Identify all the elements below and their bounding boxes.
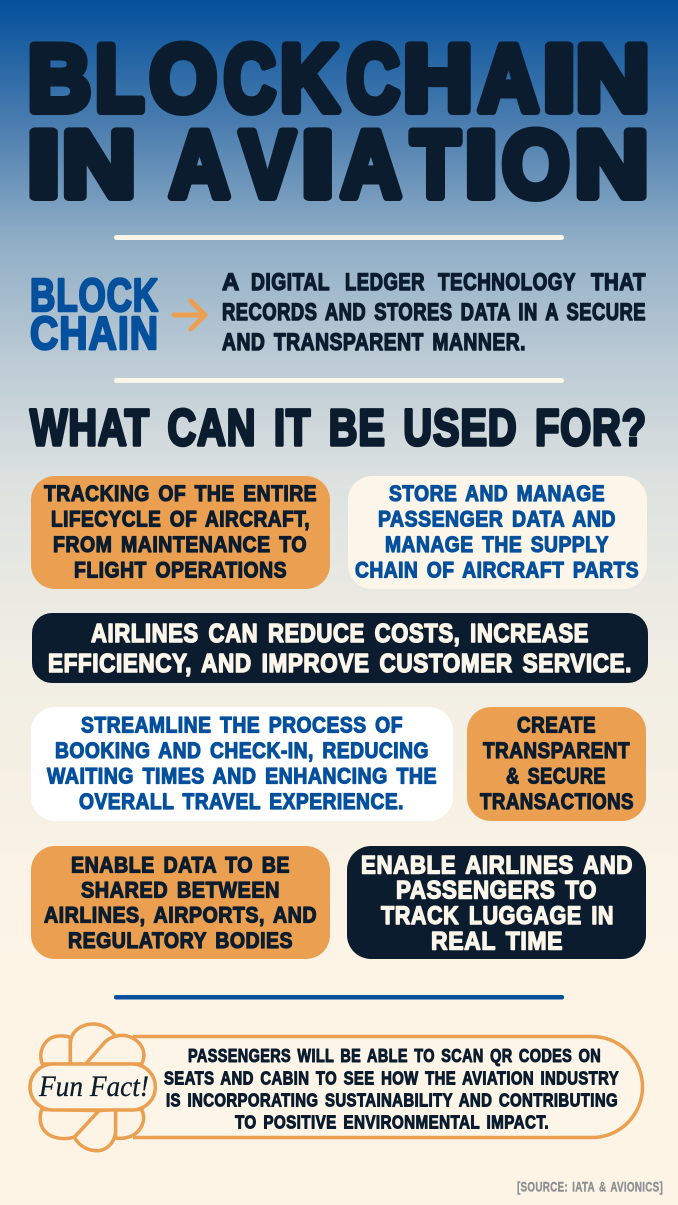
panel: transparent transactions: CREATE [517, 712, 596, 738]
title [27, 26, 650, 216]
panel: luggage tracking [347, 846, 646, 959]
panel: passenger data: STORE AND MANAGE [389, 481, 605, 506]
title line 2: O [502, 112, 569, 216]
definition text: THAT [591, 269, 646, 296]
title line 2: T [411, 112, 460, 216]
panel: luggage tracking: PASSENGERS TO [396, 876, 597, 904]
title line 1: N [576, 26, 650, 130]
title line 1: I [543, 26, 576, 130]
callout capsule [133, 1036, 642, 1138]
title line 2: A [170, 112, 230, 216]
panel: luggage tracking: ENABLE AIRLINES AND [361, 852, 633, 880]
panel: passenger data: MANAGE THE SUPPLY [385, 532, 609, 557]
fun fact text: TO POSITIVE ENVIRONMENTAL IMPACT. [235, 1112, 549, 1132]
title line 1: A [478, 26, 538, 130]
blockchain term: CHAIN [30, 307, 159, 359]
panel: transparent transactions: TRANSACTIONS [480, 789, 634, 814]
panel: tracking lifecycle [31, 476, 330, 589]
title line 2: N [62, 112, 136, 216]
title line 1: B [28, 26, 91, 130]
title line 1: C [224, 26, 276, 130]
label pill [30, 1064, 155, 1110]
panel: data sharing [31, 846, 330, 959]
definition text: DIGITAL [251, 269, 330, 296]
panel: tracking lifecycle: TRACKING OF THE ENTIRE [44, 481, 317, 506]
panel: fun fact [30, 1024, 642, 1151]
panel: airlines benefits [32, 613, 648, 683]
panel: data sharing: AIRLINES, AIRPORTS, AND [44, 902, 317, 928]
fun fact text [164, 1046, 619, 1132]
icon: flower badge [30, 1024, 155, 1151]
definition text: LEDGER [345, 269, 425, 296]
panel: passenger data: PASSENGER DATA AND [378, 506, 616, 532]
blockchain term: BLOCK [30, 269, 159, 321]
title line 2: A [341, 112, 401, 216]
panel: luggage tracking: REAL TIME [431, 928, 563, 956]
fun fact label: Fun Fact! [38, 1070, 149, 1103]
title line 2: I [465, 112, 498, 216]
panel: airlines benefits: AIRLINES CAN REDUCE COSTS, INCREASE [91, 618, 589, 648]
panel: transparent transactions: TRANSPARENT [483, 738, 630, 763]
panel: streamline booking: STREAMLINE THE PROCESS OF [81, 712, 403, 738]
panel: tracking lifecycle: LIFECYCLE OF AIRCRAFT, [51, 506, 310, 532]
panel: transparent transactions: & SECURE [506, 764, 606, 788]
title line 2: I [27, 112, 60, 216]
panel: passenger data [348, 476, 647, 589]
title line 1: L [95, 26, 144, 130]
panel: transparent transactions [467, 707, 646, 821]
definition text: TECHNOLOGY [438, 269, 576, 296]
panel: streamline booking: OVERALL TRAVEL EXPERIENCE. [79, 789, 404, 814]
panel: data sharing: REGULATORY BODIES [68, 928, 293, 953]
title line 2: N [575, 112, 649, 216]
panel: data sharing: ENABLE DATA TO BE [71, 852, 290, 878]
panel: luggage tracking: TRACK LUGGAGE IN [381, 902, 614, 930]
panel: streamline booking: WAITING TIMES AND ENHANCING THE [47, 764, 437, 788]
panel: streamline booking [31, 707, 453, 821]
definition text: A [222, 269, 240, 296]
title line 1: C [347, 26, 399, 130]
panel: streamline booking: BOOKING AND CHECK-IN, REDUCING [55, 738, 429, 763]
icon: arrow [174, 301, 205, 329]
panel: tracking lifecycle: FROM MAINTENANCE TO [53, 532, 307, 557]
definition text [222, 269, 646, 356]
panel: passenger data: CHAIN OF AIRCRAFT PARTS [355, 558, 639, 582]
title line 1: O [150, 26, 217, 130]
blockchain term [30, 269, 159, 359]
panel: data sharing: SHARED BETWEEN [81, 878, 280, 902]
panel: tracking lifecycle: FLIGHT OPERATIONS [74, 558, 287, 582]
definition text: AND TRANSPARENT MANNER. [222, 329, 526, 356]
title line 1: K [280, 26, 339, 130]
title line 1: H [403, 26, 473, 130]
panel: definition [30, 269, 646, 359]
title line 2: V [240, 112, 295, 216]
title line 2: I [301, 112, 334, 216]
